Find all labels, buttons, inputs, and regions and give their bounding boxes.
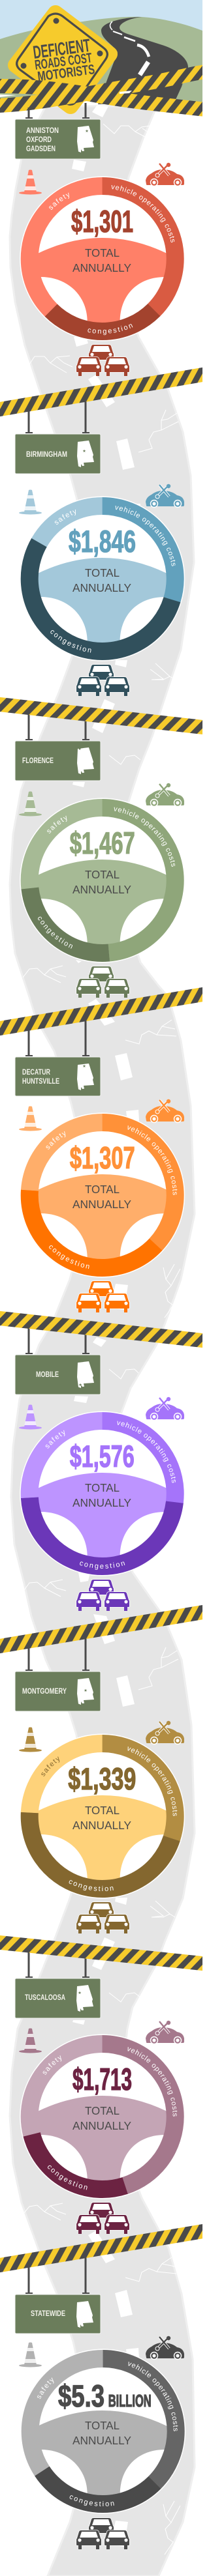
road sign: Decatur Huntsville: HUNTSVILLE: [22, 1078, 59, 1086]
panel: Statewide wheel: safety: [37, 2377, 54, 2399]
panel: Tuscaloosa wheel: TOTAL: [85, 2104, 120, 2117]
panel: Montgomery wheel: safety: [41, 1757, 60, 1776]
icon: car repair: [146, 1721, 184, 1744]
panel: Florence wheel: [20, 798, 184, 963]
icon: car repair: [146, 163, 184, 186]
panel: Birmingham wheel: TOTAL: [85, 566, 120, 579]
panel: Anniston wheel: safety: [49, 193, 69, 210]
road centre line: [110, 22, 149, 75]
icon: cone: [19, 791, 42, 816]
road sign: Tuscaloosa: TUSCALOOSA: [25, 1994, 65, 2002]
panel: Decatur Huntsville wheel: safety: [46, 1131, 65, 1150]
panel: Decatur Huntsville wheel: TOTAL: [85, 1183, 120, 1196]
panel: Florence wheel: $1,467: [70, 826, 135, 860]
icon: traffic: [76, 2203, 129, 2234]
icon: car repair: [146, 783, 184, 807]
panel: Mobile wheel: congestion: [80, 1561, 125, 1570]
road sign: Montgomery: MONTGOMERY: [22, 1688, 67, 1696]
icon: cone: [19, 1405, 42, 1430]
icon: cone: [19, 2342, 42, 2367]
icon: car repair: [146, 484, 184, 508]
panel: Statewide wheel: congestion: [69, 2495, 114, 2506]
panel: Anniston wheel: $1,301: [71, 204, 133, 239]
road sign: Anniston Oxford Gadsden: [15, 103, 101, 159]
panel: Tuscaloosa wheel: $1,713: [72, 2062, 132, 2096]
icon: cone: [19, 1727, 42, 1752]
panel: Tuscaloosa wheel: ANNUALLY: [72, 2119, 131, 2132]
panel: Decatur Huntsville wheel: congestion: [49, 1245, 89, 1269]
sign title: ROADS COST: [34, 51, 93, 73]
icon: traffic: [76, 1281, 129, 1312]
panel: Mobile wheel: [20, 1411, 184, 1576]
green hill: [0, 17, 202, 109]
panel: Anniston wheel: TOTAL: [85, 246, 120, 259]
road sign: Statewide: STATEWIDE: [31, 2310, 65, 2318]
panel: Florence wheel: safety: [47, 816, 67, 833]
road sign: Mobile: MOBILE: [36, 1371, 59, 1379]
icon: traffic: [76, 2518, 129, 2549]
road sign: Birmingham: [15, 394, 101, 474]
panel: Decatur Huntsville wheel: ANNUALLY: [72, 1198, 131, 1211]
icon: traffic: [76, 1902, 129, 1933]
panel: Birmingham wheel: safety: [55, 510, 76, 525]
hazard bar: [0, 986, 209, 1036]
panel: Statewide wheel: TOTAL: [85, 2419, 120, 2432]
panel: Decatur Huntsville wheel: [21, 1113, 185, 1277]
panel: Mobile wheel: safety: [46, 1430, 65, 1449]
road sign: Montgomery: [15, 1632, 101, 1711]
sign title: MOTORISTS: [37, 62, 95, 84]
icon: cone: [19, 169, 42, 194]
panel: Decatur Huntsville wheel: $1,307: [70, 1140, 135, 1175]
road sign: Anniston Oxford Gadsden: ANNISTON: [26, 127, 59, 135]
panel: Mobile wheel: ANNUALLY: [72, 1496, 131, 1509]
panel: Mobile wheel: $1,576: [70, 1439, 135, 1473]
panel: Birmingham wheel: ANNUALLY: [72, 581, 131, 594]
panel: Birmingham wheel: congestion: [50, 630, 91, 653]
sign title: [32, 35, 95, 85]
panel: Florence wheel: ANNUALLY: [72, 883, 131, 896]
panel: Anniston wheel: vehicle operating costs: [111, 185, 175, 242]
icon: cone: [19, 2028, 42, 2053]
panel: Florence wheel: congestion: [38, 916, 72, 949]
road sign: Decatur Huntsville: [15, 1014, 101, 1096]
panel: Montgomery wheel: ANNUALLY: [72, 1819, 131, 1832]
icon: traffic: [76, 345, 129, 376]
hazard bar: [0, 1604, 209, 1654]
road sign: Anniston Oxford Gadsden: OXFORD: [26, 136, 52, 144]
panel: Statewide wheel: [21, 2349, 185, 2514]
panel: Florence wheel: vehicle operating costs: [114, 807, 175, 867]
icon: traffic: [76, 966, 129, 998]
panel: Tuscaloosa wheel: [20, 2034, 184, 2199]
panel: Mobile wheel: vehicle operating costs: [118, 1421, 176, 1483]
panel: Birmingham wheel: $1,846: [69, 524, 136, 558]
panel: Statewide wheel: $5.3: [58, 2379, 104, 2413]
icon: traffic: [76, 665, 129, 696]
hazard bar: [0, 1310, 209, 1349]
road sign: Tuscaloosa: [15, 1946, 101, 2018]
road sign: Anniston Oxford Gadsden: GADSDEN: [26, 145, 56, 153]
icon: car repair: [146, 2021, 184, 2044]
panel: Montgomery wheel: vehicle operating costs: [128, 1746, 178, 1816]
icon: cone: [19, 490, 42, 515]
road sign: Mobile: [15, 1322, 101, 1395]
panel: Decatur Huntsville wheel: vehicle operating costs: [128, 1125, 178, 1195]
road sign: Florence: FLORENCE: [22, 757, 54, 765]
panel: Statewide wheel: ANNUALLY: [72, 2434, 131, 2447]
hazard bar: [0, 697, 209, 736]
sign title: DEFICIENT: [32, 35, 91, 63]
panel: Mobile wheel: TOTAL: [85, 1481, 120, 1494]
panel: Anniston wheel: [20, 176, 184, 341]
icon: car repair: [146, 2336, 184, 2360]
panel: Statewide wheel: vehicle operating costs: [128, 2362, 178, 2431]
icon: car repair: [146, 1099, 184, 1123]
header scene: [0, 0, 206, 109]
panel: Birmingham wheel: [21, 497, 185, 661]
panel: Birmingham wheel: vehicle operating costs: [115, 506, 175, 566]
panel: Anniston wheel: ANNUALLY: [72, 261, 131, 274]
icon: car repair: [146, 1397, 184, 1421]
panel: Montgomery wheel: $1,339: [68, 1761, 136, 1796]
panel: Anniston wheel: congestion: [88, 324, 133, 335]
icon: cone: [19, 1107, 42, 1131]
road sign: Birmingham: BIRMINGHAM: [26, 451, 67, 459]
hazard bar: [0, 366, 209, 418]
warning sign: [16, 13, 110, 106]
panel: Montgomery wheel: TOTAL: [85, 1804, 120, 1817]
road sign: Statewide: [15, 2251, 101, 2334]
panel: Tuscaloosa wheel: congestion: [48, 2165, 88, 2190]
panel: Montgomery wheel: [21, 1733, 185, 1899]
hazard bar: [0, 2223, 209, 2273]
panel: Montgomery wheel: congestion: [69, 1880, 114, 1891]
hazard bar: [0, 1935, 209, 1972]
road sign: Florence: [15, 708, 101, 781]
road sign: Decatur Huntsville: DECATUR: [22, 1069, 51, 1077]
icon: traffic: [76, 1580, 129, 1611]
panel: Tuscaloosa wheel: vehicle operating costs: [128, 2047, 178, 2117]
winding dark road: [98, 17, 188, 104]
panel: Tuscaloosa wheel: safety: [43, 2055, 61, 2075]
panel: Florence wheel: TOTAL: [85, 868, 120, 881]
panel: Statewide wheel: BILLION: [108, 2391, 152, 2410]
hazard tapes: [0, 72, 206, 109]
